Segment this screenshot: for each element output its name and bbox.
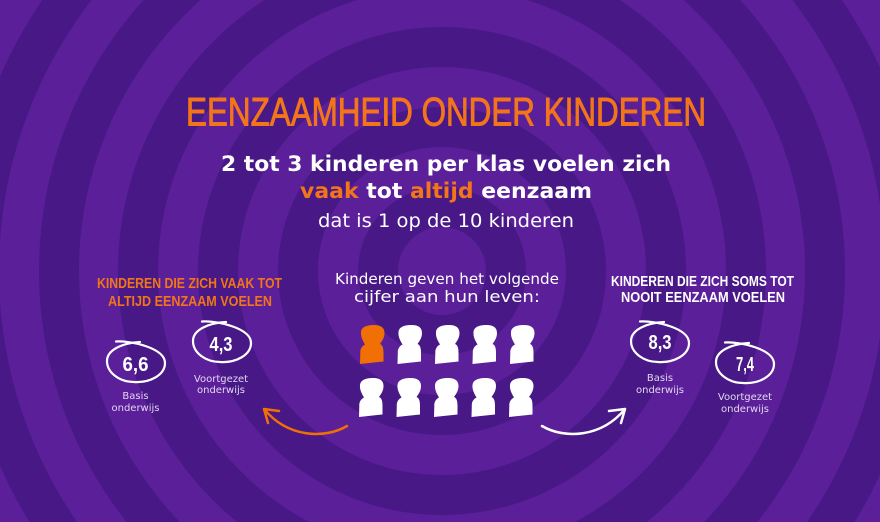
left heading: ALTIJD EENZAAM VOELEN xyxy=(108,293,272,310)
center intro text: cijfer aan hun leven: xyxy=(354,287,540,306)
left heading xyxy=(97,275,282,310)
stat: 7,4 voortgezet onderwijs: 7,4 xyxy=(736,354,755,376)
stat: 6,6 basisonderwijs: 6,6 xyxy=(122,354,148,376)
title: EENZAAMHEID ONDER KINDEREN xyxy=(186,90,706,134)
stat: 6,6 basisonderwijs: Basis xyxy=(122,391,149,402)
stat: 8,3 basisonderwijs: onderwijs xyxy=(636,385,684,396)
headline text: vaak tot altijd eenzaam xyxy=(300,179,592,204)
right heading: KINDEREN DIE ZICH SOMS TOT xyxy=(611,273,794,290)
center intro text: Kinderen geven het volgende xyxy=(335,270,559,288)
headline text: dat is 1 op de 10 kinderen xyxy=(318,210,574,232)
arrow: white to right xyxy=(542,409,625,434)
stat: 7,4 voortgezet onderwijs: Voortgezet xyxy=(718,392,772,403)
stat: 4,3 voortgezet onderwijs: onderwijs xyxy=(197,385,245,396)
stat: 8,3 basisonderwijs xyxy=(631,321,689,396)
center intro text xyxy=(335,270,559,306)
stat: 8,3 basisonderwijs: 8,3 xyxy=(648,332,672,354)
stat: 6,6 basisonderwijs: onderwijs xyxy=(111,403,160,414)
stat: 4,3 voortgezet onderwijs: 4,3 xyxy=(210,334,232,356)
stat: 7,4 voortgezet onderwijs xyxy=(716,342,774,415)
stat: 4,3 voortgezet onderwijs: Voortgezet xyxy=(194,374,248,385)
left heading: KINDEREN DIE ZICH VAAK TOT xyxy=(97,275,282,292)
arrow: orange to left xyxy=(264,409,347,434)
stat: 8,3 basisonderwijs: Basis xyxy=(647,373,673,384)
right heading: NOOIT EENZAAM VOELEN xyxy=(621,289,785,306)
people icons: 1 of 10 highlighted xyxy=(359,325,534,417)
stat: 4,3 voortgezet onderwijs xyxy=(193,321,251,396)
right heading xyxy=(611,273,794,306)
stat: 7,4 voortgezet onderwijs: onderwijs xyxy=(721,404,769,415)
headline text: 2 tot 3 kinderen per klas voelen zich xyxy=(221,152,671,177)
stat: 6,6 basisonderwijs xyxy=(107,341,165,414)
headline text xyxy=(221,152,671,232)
